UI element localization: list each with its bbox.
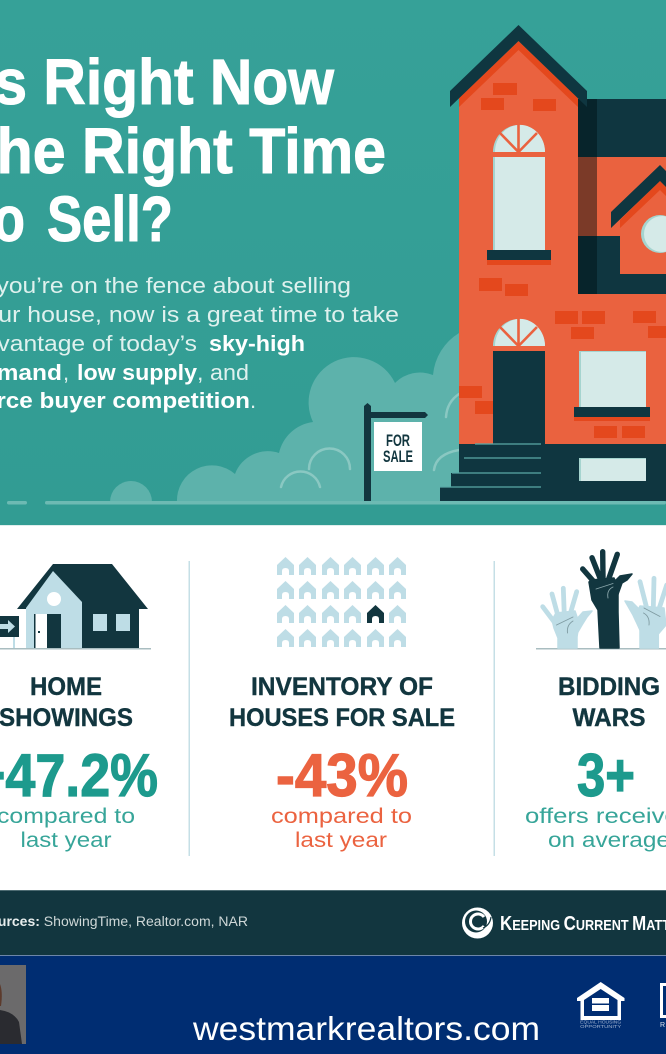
panel: agency banner: [0, 955, 666, 1054]
intro paragraph: low supply: [77, 360, 198, 385]
caption: on average: [548, 829, 666, 852]
icon: spiral logo: [462, 908, 493, 938]
left hand: [543, 588, 592, 648]
title: Sell?: [47, 183, 173, 255]
website: westmarkrealtors.com: [192, 1010, 540, 1047]
intro paragraph: sky-high: [209, 331, 305, 356]
stat: inventory of houses for sale: [229, 673, 455, 852]
upper arched window: [487, 124, 551, 265]
basement and steps: [440, 444, 666, 501]
for sale sign: FOR: [386, 432, 410, 450]
for sale sign: SALE: [383, 448, 413, 466]
icon: realtor mark: R: [660, 1022, 665, 1029]
agent photo: [0, 965, 26, 1044]
icon: equal housing opportunity: [577, 982, 624, 1029]
icon: realtor mark: [660, 983, 666, 1029]
heading: SHOWINGS: [0, 704, 133, 732]
icon: house with arrow sign: [0, 564, 151, 650]
caption: compared to: [0, 805, 135, 828]
right hand: [625, 578, 666, 648]
center hand: [583, 552, 632, 648]
caption: offers received: [525, 805, 666, 828]
heading: HOUSES FOR SALE: [229, 704, 455, 732]
title: [0, 46, 386, 255]
ground line: [7, 501, 666, 504]
stat: bidding wars: [525, 673, 666, 852]
panel: statistics: [0, 525, 666, 890]
intro paragraph: , and: [197, 360, 249, 385]
value: -43%: [276, 742, 408, 809]
caption: compared to: [271, 805, 412, 828]
caption: last year: [295, 829, 387, 852]
caption: last year: [20, 829, 112, 852]
heading: [0, 673, 133, 732]
icon: raised hands: [536, 552, 666, 650]
heading: [229, 673, 455, 732]
lower right window: [574, 351, 650, 421]
value: 3+: [577, 742, 635, 809]
icon: grid of houses: [277, 557, 406, 647]
bushes: [110, 333, 459, 502]
intro paragraph: [0, 273, 399, 413]
for sale sign: [364, 403, 428, 501]
icon: equal housing opportunity: OPPORTUNITY: [580, 1024, 621, 1029]
icon: equal housing opportunity: EQUAL HOUSING: [580, 1020, 622, 1024]
heading: WARS: [572, 704, 646, 732]
heading: [558, 673, 660, 732]
bricks: [459, 83, 666, 438]
main roof: [450, 25, 587, 107]
heading: HOME: [30, 673, 102, 701]
main tower body: [459, 44, 666, 444]
intro paragraph: ,: [63, 360, 69, 385]
heading: BIDDING: [558, 673, 660, 701]
caption: [525, 805, 666, 852]
upper dark wing: [578, 99, 666, 294]
house illustration: [440, 25, 666, 501]
panel: sources footer: [0, 890, 666, 955]
door: [493, 318, 545, 445]
panel: hero background: [0, 0, 666, 525]
caption: [271, 805, 412, 852]
stat: home showings: [0, 673, 158, 852]
small gable: [611, 165, 666, 274]
intro paragraph: .: [250, 388, 256, 413]
heading: INVENTORY OF: [251, 673, 433, 701]
caption: [0, 805, 135, 852]
